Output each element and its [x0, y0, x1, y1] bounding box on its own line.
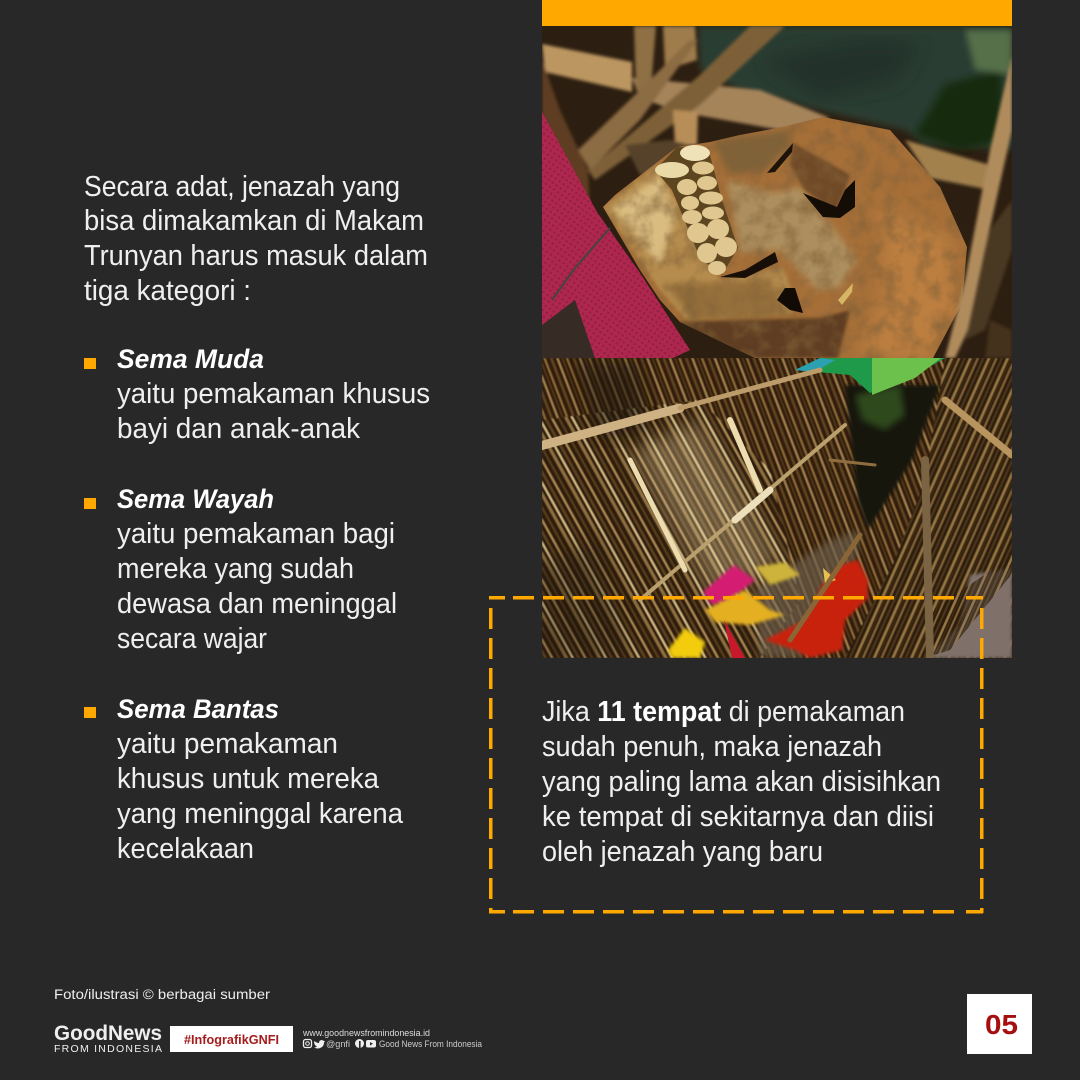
left lattice — [542, 400, 800, 658]
website and social handles: @gnfi — [326, 1039, 350, 1049]
list item: Sema Muda: bayi dan anak-anak — [117, 413, 360, 445]
list item: Sema Wayah: mereka yang sudah — [117, 553, 354, 585]
callout text: ke tempat di sekitarnya dan diisi — [542, 801, 934, 833]
intro text: tiga kategori : — [84, 275, 251, 307]
list item: Sema Muda — [84, 344, 430, 445]
intro text: Trunyan harus masuk dalam — [84, 240, 428, 272]
intro text: Secara adat, jenazah yang — [84, 171, 400, 203]
callout text — [542, 696, 941, 868]
bullet — [84, 358, 96, 369]
dashed callout box — [489, 596, 984, 914]
list item: Sema Bantas — [84, 694, 404, 865]
yellow cloth — [755, 562, 800, 585]
callout text: Jika 11 tempat di pemakaman — [542, 696, 905, 728]
callout text: sudah penuh, maka jenazah — [542, 731, 882, 763]
list item: Sema Bantas: Sema Bantas — [117, 694, 279, 724]
photo credit: Foto/ilustrasi © berbagai sumber — [54, 987, 271, 1002]
callout text: yang paling lama akan disisihkan — [542, 766, 941, 798]
page number: 05 — [985, 1009, 1018, 1040]
list item: Sema Bantas: kecelakaan — [117, 833, 254, 865]
skull cranium — [603, 117, 967, 358]
brow flap — [790, 143, 850, 212]
bamboo pole on right — [945, 55, 1012, 358]
orange top bar — [542, 0, 1012, 26]
hashtag badge — [170, 1026, 293, 1052]
green umbrella — [795, 358, 945, 395]
dark sockets — [803, 180, 855, 218]
maxilla and nasal bone — [727, 180, 857, 290]
icon: youtube — [366, 1040, 376, 1048]
icon: twitter — [314, 1040, 325, 1048]
list item: Sema Bantas: yang meninggal karena — [117, 798, 404, 830]
list item: Sema Wayah: dewasa dan meninggal — [117, 588, 397, 620]
list item: Sema Wayah: yaitu pemakaman bagi — [117, 518, 395, 550]
intro text — [84, 171, 428, 307]
logo: GoodNews From Indonesia — [54, 1021, 162, 1055]
photo: bamboo graves — [540, 358, 1012, 658]
icon: facebook — [355, 1039, 364, 1048]
bullet — [84, 498, 96, 509]
list item: Sema Wayah: Sema Wayah — [117, 484, 274, 514]
planks — [542, 26, 1012, 358]
bullet — [84, 707, 96, 718]
bamboo cross bars — [540, 370, 1012, 658]
lower ridge — [680, 310, 850, 358]
list item: Sema Muda: Sema Muda — [117, 344, 264, 374]
list item: Sema Muda: yaitu pemakaman khusus — [117, 378, 430, 410]
jaw bone — [603, 163, 793, 320]
red cloth — [765, 560, 868, 658]
ground with offerings — [755, 530, 860, 658]
dark undergrowth — [845, 385, 940, 530]
list item: Sema Bantas: yaitu pemakaman — [117, 728, 338, 760]
list item: Sema Wayah: secara wajar — [117, 623, 267, 655]
logo: GoodNews From Indonesia: GoodNews — [54, 1021, 162, 1045]
intro text: bisa dimakamkan di Makam — [84, 205, 424, 237]
website and social handles: Good News From Indonesia — [379, 1039, 482, 1049]
list item: Sema Bantas: khusus untuk mereka — [117, 763, 380, 795]
photo: skull — [542, 26, 1012, 360]
right lattice — [845, 358, 1012, 658]
pink cloth — [703, 565, 755, 605]
hashtag badge: #InfografikGNFI — [184, 1032, 279, 1047]
icon: instagram — [304, 1040, 312, 1048]
callout text: oleh jenazah yang baru — [542, 836, 823, 868]
website and social handles — [302, 1028, 482, 1049]
page number — [967, 994, 1032, 1054]
list item: Sema Wayah — [84, 484, 397, 655]
moss rock — [698, 26, 1012, 150]
website and social handles: www.goodnewsfromindonesia.id — [302, 1028, 430, 1038]
logo: GoodNews From Indonesia: FROM INDONESIA — [54, 1043, 162, 1055]
red net fabric — [542, 112, 690, 358]
teeth — [655, 147, 738, 275]
